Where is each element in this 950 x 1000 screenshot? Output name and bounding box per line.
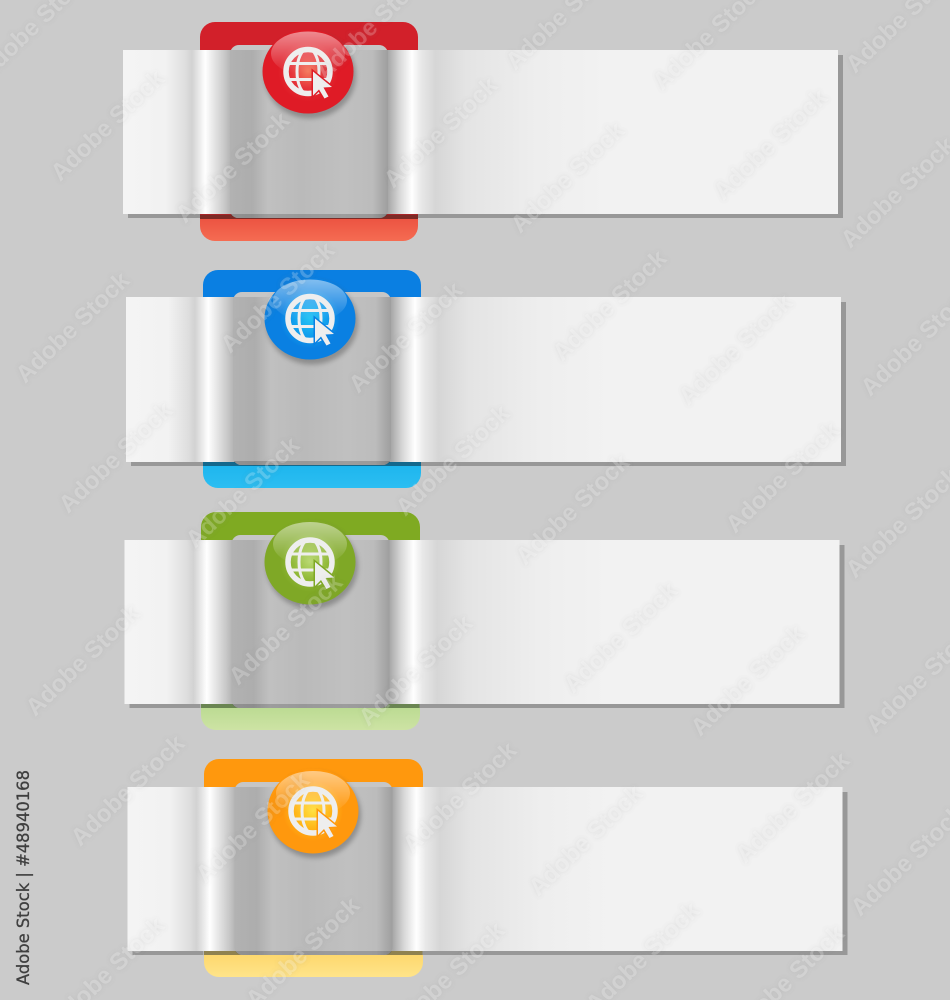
watermarks: Adobe Stock — [171, 106, 295, 228]
watermarks: Adobe Stock — [224, 568, 348, 690]
watermarks: Adobe Stock — [21, 599, 145, 721]
metal fold centre — [234, 787, 392, 955]
red tab — [200, 22, 418, 241]
watermarks: Adobe Stock — [216, 236, 340, 358]
watermarks: Adobe Stock — [686, 619, 810, 741]
icon: globe button — [262, 30, 356, 118]
watermarks: Adobe Stock — [391, 399, 515, 521]
watermarks: Adobe Stock — [548, 244, 672, 366]
banner shadow — [132, 792, 848, 955]
metal notch — [234, 782, 392, 802]
watermarks: Adobe Stock — [344, 276, 468, 398]
watermarks: Adobe Stock — [709, 83, 833, 205]
watermarks: Adobe Stock — [674, 288, 798, 410]
watermarks: Adobe Stock — [559, 576, 683, 698]
paper strip — [126, 297, 841, 462]
metal fold centre — [232, 540, 390, 708]
icon: globe button — [264, 520, 358, 609]
banner shadow — [128, 55, 843, 218]
metal notch — [233, 292, 391, 312]
watermarks: Adobe Stock — [54, 396, 178, 518]
watermarks: Adobe Stock — [721, 416, 845, 538]
stock id label: Adobe Stock | #48940168 — [14, 770, 34, 985]
orange tab — [204, 759, 423, 977]
watermarks: Adobe Stock — [181, 431, 305, 553]
metal bottom edge — [231, 214, 387, 218]
banner 3: green — [124, 512, 844, 730]
watermarks: Adobe Stock — [506, 116, 630, 238]
watermarks: Adobe Stock — [354, 609, 478, 731]
metal fold centre — [233, 297, 391, 465]
metal bottom edge — [232, 704, 389, 708]
metal fold centre — [230, 50, 388, 218]
watermarks: Adobe Stock — [191, 766, 315, 888]
watermarks: Adobe Stock — [379, 71, 503, 193]
banner shadow — [131, 302, 846, 466]
watermarks: Adobe Stock — [398, 736, 522, 858]
banner 2: blue — [126, 270, 846, 488]
icon: globe button — [264, 278, 358, 364]
banner shadow — [130, 545, 844, 708]
watermarks: Adobe Stock — [731, 746, 855, 868]
paper strip — [128, 787, 842, 951]
watermarks: Adobe Stock — [46, 64, 170, 186]
watermarks: Adobe Stock — [524, 779, 648, 901]
metal notch — [230, 45, 388, 65]
banner 4: orange — [128, 759, 848, 977]
metal bottom edge — [235, 951, 392, 955]
paper strip — [123, 50, 838, 214]
watermarks: Adobe Stock — [66, 729, 190, 851]
paper strip — [124, 540, 840, 704]
watermarks: Adobe Stock — [511, 448, 635, 570]
icon: globe button — [268, 768, 361, 858]
banner 1: red — [123, 22, 843, 241]
green tab — [201, 512, 420, 730]
blue tab — [203, 270, 421, 488]
watermarks: Adobe Stock — [11, 266, 135, 388]
metal notch — [232, 535, 390, 555]
metal bottom edge — [234, 461, 390, 465]
